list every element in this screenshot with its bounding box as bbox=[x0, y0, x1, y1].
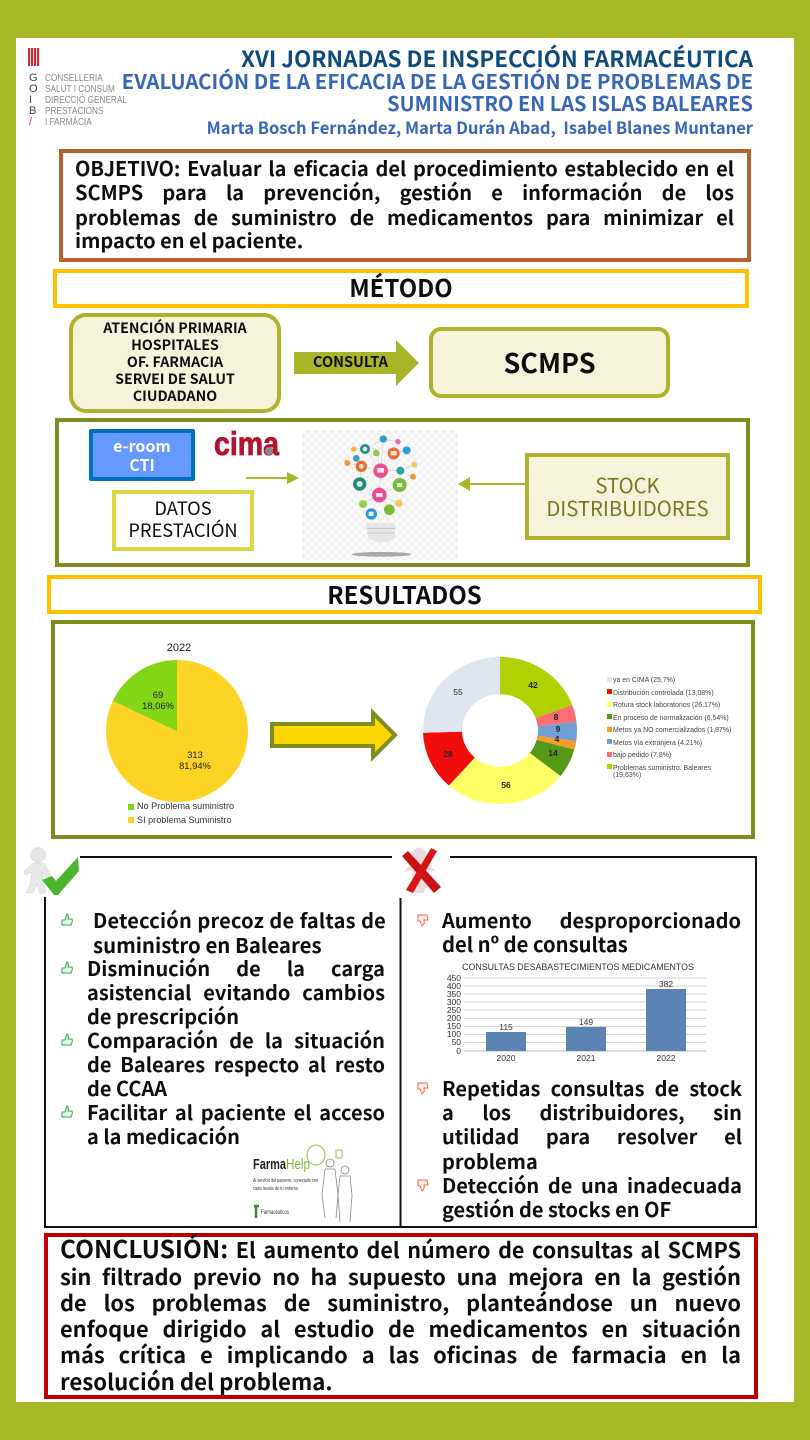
pie chart: 2022: 2022 bbox=[167, 642, 191, 654]
conclusion line 3: de los problemas de suministro, planteándose un nuevo bbox=[60, 1287, 741, 1318]
conclusion line 4: enfoque dirigido al estudio de medicamentos en situación bbox=[60, 1313, 741, 1344]
donut legend: bajo pedido (7,8%) bbox=[613, 752, 671, 759]
heading: método bbox=[53, 269, 749, 308]
bar chart: consultas: 250 bbox=[447, 1005, 461, 1015]
item: aumento, línea 2: del nº de consultas bbox=[442, 929, 628, 958]
donut chart: desglose: 42 bbox=[528, 680, 538, 690]
panel: fuentes de información bbox=[55, 418, 750, 567]
frame: ventajas e inconvenientes bbox=[44, 856, 757, 1228]
donut legend bbox=[607, 676, 731, 779]
donut chart: desglose: 14 bbox=[548, 748, 558, 758]
bar chart: consultas: 350 bbox=[447, 989, 461, 999]
icon: figura con marca de verificación bbox=[24, 847, 79, 895]
donut chart: desglose: 4 bbox=[555, 734, 560, 744]
box: origen de consultas: SERVEI DE SALUT bbox=[115, 369, 235, 389]
subtitle continuation: SUMINISTRO EN LAS ISLAS BALEARES bbox=[387, 88, 753, 117]
box: e-room CTI bbox=[89, 429, 195, 481]
bar chart: consultas: 100 bbox=[447, 1029, 461, 1039]
logo text: I FARMÀCIA bbox=[45, 117, 92, 128]
bullet: thumbs down bbox=[418, 1082, 429, 1095]
item: repetidas, línea 2: a los distribuidores, sin bbox=[442, 1097, 742, 1126]
logo text: DIRECCIÓ GENERAL bbox=[45, 95, 127, 106]
bar chart: consultas: CONSULTAS DESABASTECIMIENTOS MEDICAMENTOS bbox=[462, 962, 694, 972]
logo: FarmaHelp: Farmacéuticos bbox=[261, 1210, 289, 1216]
box: stock distribuidores bbox=[525, 453, 730, 540]
logo: FarmaHelp bbox=[253, 1144, 352, 1222]
donut legend: En proceso de normalización (6,54%) bbox=[613, 715, 729, 722]
box: stock distribuidores: STOCK bbox=[595, 469, 660, 499]
logo: Govern bbox=[28, 48, 127, 128]
item: comparación, línea 2: de Baleares respecto al resto bbox=[87, 1049, 385, 1078]
item: carga asistencial: Disminución de la carga bbox=[87, 953, 385, 982]
bar chart: consultas: 200 bbox=[447, 1013, 461, 1023]
conclusion line 5: más crítica e implicando a las oficinas de farmacia en la bbox=[60, 1339, 741, 1370]
conclusion line 1: CONCLUSIÓN: El aumento del número de consultas al SCMPS bbox=[60, 1231, 741, 1266]
logo: FarmaHelp: Help bbox=[286, 1156, 310, 1173]
donut legend: ya en CIMA (25,7%) bbox=[613, 677, 675, 684]
panel: gráficos de resultados bbox=[51, 620, 755, 839]
logo letters: / bbox=[29, 116, 32, 128]
logo text bbox=[45, 73, 127, 128]
item: carga asistencial, línea 3: de prescripción bbox=[87, 1001, 239, 1030]
title line: XVI JORNADAS DE INSPECCIÓN FARMACÉUTICA bbox=[241, 42, 753, 74]
logo letters: G bbox=[29, 72, 38, 84]
donut chart: desglose: 8 bbox=[554, 712, 559, 722]
subtitle: EVALUACIÓN DE LA EFICACIA DE LA GESTIÓN DE PROBLEMAS DE bbox=[122, 65, 753, 95]
logo letters bbox=[29, 72, 38, 128]
donut chart: desglose: 9 bbox=[556, 724, 561, 734]
bar chart: consultas: 2021 bbox=[577, 1053, 596, 1063]
objective line 4: impacto en el paciente. bbox=[75, 225, 303, 254]
bar chart: consultas: 400 bbox=[447, 981, 461, 991]
donut legend: Distribución controlada (13,08%) bbox=[613, 690, 714, 697]
box: origen de consultas: OF. FARMACIA bbox=[127, 352, 223, 372]
panel: conclusión bbox=[44, 1233, 758, 1399]
logo: cima: cima bbox=[214, 425, 280, 462]
box: origen de consultas: CIUDADANO bbox=[133, 386, 217, 406]
panel: objetivo bbox=[59, 149, 751, 262]
bar chart: consultas: 50 bbox=[452, 1037, 461, 1047]
bullet: thumbs up bbox=[62, 1033, 73, 1046]
box: SCMPS bbox=[429, 327, 670, 398]
arrow: datos hacia base bbox=[246, 472, 299, 484]
logo text: CONSELLERIA bbox=[45, 73, 103, 84]
box: origen de consultas: ATENCIÓN PRIMARIA bbox=[103, 318, 247, 338]
icon: crest bbox=[28, 48, 40, 66]
bar chart: consultas bbox=[447, 962, 706, 1063]
donut legend: Problemas suministro. Baleares bbox=[613, 765, 711, 772]
authors: Marta Bosch Fernández, Marta Durán Abad, Isabel Blanes Muntaner bbox=[207, 115, 753, 139]
box: origen de consultas: HOSPITALES bbox=[131, 335, 219, 355]
bar chart: consultas: 300 bbox=[447, 997, 461, 1007]
donut legend: Metos ya NO comercializados (1,87%) bbox=[613, 727, 731, 734]
logo letters: B bbox=[29, 105, 36, 117]
icon: figura con cruz roja bbox=[402, 848, 441, 893]
bar chart: consultas: 2022 bbox=[657, 1053, 676, 1063]
logo: FarmaHelp: Farma bbox=[253, 1156, 286, 1173]
pie chart: 2022 bbox=[106, 642, 248, 825]
bullet: thumbs up bbox=[62, 1105, 73, 1118]
box: origen de consultas bbox=[69, 313, 281, 413]
logo text: SALUT I CONSUM bbox=[45, 84, 115, 95]
item: detección precoz, continuación: suministro en Baleares bbox=[93, 929, 322, 959]
donut chart: desglose: 56 bbox=[501, 780, 511, 790]
item: gestión, línea 2: gestión de stocks en OF bbox=[442, 1194, 671, 1223]
heading: método: MÉTODO bbox=[349, 269, 453, 304]
donut chart: desglose: 55 bbox=[453, 687, 463, 697]
item: comparación: Comparación de la situación bbox=[87, 1025, 385, 1054]
logo: FarmaHelp: Al servicio del paciente, conectado con bbox=[253, 1178, 318, 1184]
arrow: stock hacia base bbox=[458, 477, 525, 491]
donut chart: desglose bbox=[423, 657, 577, 804]
heading: resultados: RESULTADOS bbox=[327, 576, 482, 611]
pie chart: 2022: 18,06% bbox=[142, 700, 174, 711]
bullet: thumbs down bbox=[418, 914, 429, 927]
pie chart: 2022: 81,94% bbox=[179, 760, 211, 771]
image: bombilla de ideas bbox=[302, 430, 458, 560]
box: datos prestación bbox=[112, 490, 254, 551]
logo: FarmaHelp: cada receta de tu entorno bbox=[253, 1186, 298, 1192]
conclusion line 2: sin filtrado previo no ha supuesto una mejora en la gestión bbox=[60, 1261, 741, 1292]
item: carga asistencial, línea 2: asistencial evitando cambios bbox=[87, 977, 385, 1006]
objective line 1: OBJETIVO: Evaluar la eficacia del procedimiento establecido en el bbox=[75, 153, 734, 182]
item: detección precoz: Detección precoz de faltas de bbox=[93, 905, 386, 934]
item: aumento de consultas: Aumento desproporcionado bbox=[442, 905, 741, 934]
donut legend: Metos vía extranjera (4,21%) bbox=[613, 740, 702, 747]
box: SCMPS: SCMPS bbox=[503, 342, 596, 381]
item: comparación, línea 3: de CCAA bbox=[87, 1073, 167, 1102]
panel: inconvenientes bbox=[418, 905, 742, 1223]
pie chart: 2022: 313 bbox=[187, 749, 203, 760]
arrow: de gráfico a desglose bbox=[270, 708, 398, 762]
bar chart: consultas: 150 bbox=[447, 1021, 461, 1031]
item: acceso, línea 2: a la medicación bbox=[87, 1121, 240, 1150]
donut legend: Rotura stock laboratorios (26,17%) bbox=[613, 702, 720, 709]
bar chart: consultas: 382 bbox=[659, 979, 673, 989]
box: e-room CTI: e-room bbox=[113, 433, 171, 457]
bar chart: consultas: 149 bbox=[579, 1017, 593, 1027]
bar chart: consultas: 0 bbox=[456, 1046, 461, 1056]
box: e-room CTI: CTI bbox=[129, 452, 155, 476]
logo letters: I bbox=[29, 94, 32, 106]
item: repetidas, línea 4: problema bbox=[442, 1146, 538, 1175]
item: gestión de stocks: Detección de una inadecuada bbox=[442, 1170, 742, 1199]
pie chart: 2022: 69 bbox=[153, 689, 163, 700]
logo text: PRESTACIONS bbox=[45, 106, 103, 117]
bar chart: consultas: 115 bbox=[499, 1022, 513, 1032]
objective line 2: SCMPS para la prevención, gestión e información de los bbox=[75, 177, 734, 206]
heading: resultados bbox=[47, 575, 762, 614]
pie chart: 2022: SI problema Suministro bbox=[137, 815, 232, 825]
bullet: thumbs up bbox=[62, 961, 73, 974]
bar chart: consultas: 450 bbox=[447, 973, 461, 983]
box: datos prestación: PRESTACIÓN bbox=[128, 517, 238, 543]
donut chart: desglose: 28 bbox=[443, 749, 453, 759]
title block bbox=[122, 42, 753, 139]
objective line 3: problemas de suministro de medicamentos para minimizar el bbox=[75, 202, 734, 231]
donut legend: (19,63%) bbox=[613, 772, 641, 779]
bar chart: consultas: 2020 bbox=[497, 1053, 516, 1063]
arrow label: CONSULTA bbox=[313, 351, 388, 372]
item: repetidas consultas: Repetidas consultas de stock bbox=[442, 1073, 742, 1102]
conclusion line 6: resolución del problema. bbox=[60, 1365, 333, 1397]
item: repetidas, línea 3: utilidad para resolver el bbox=[442, 1121, 742, 1150]
item: acceso a la medicación: Facilitar al paciente el acceso bbox=[87, 1097, 385, 1126]
bullet: thumbs down bbox=[418, 1180, 429, 1192]
arrow: consulta bbox=[294, 340, 419, 386]
panel: ventajas bbox=[62, 905, 386, 1150]
box: stock distribuidores: DISTRIBUIDORES bbox=[546, 492, 709, 522]
bullet: thumbs up bbox=[62, 913, 73, 926]
logo letters: O bbox=[29, 83, 38, 95]
pie chart: 2022: No Problema suministro bbox=[137, 801, 234, 811]
box: datos prestación: DATOS bbox=[154, 495, 212, 521]
